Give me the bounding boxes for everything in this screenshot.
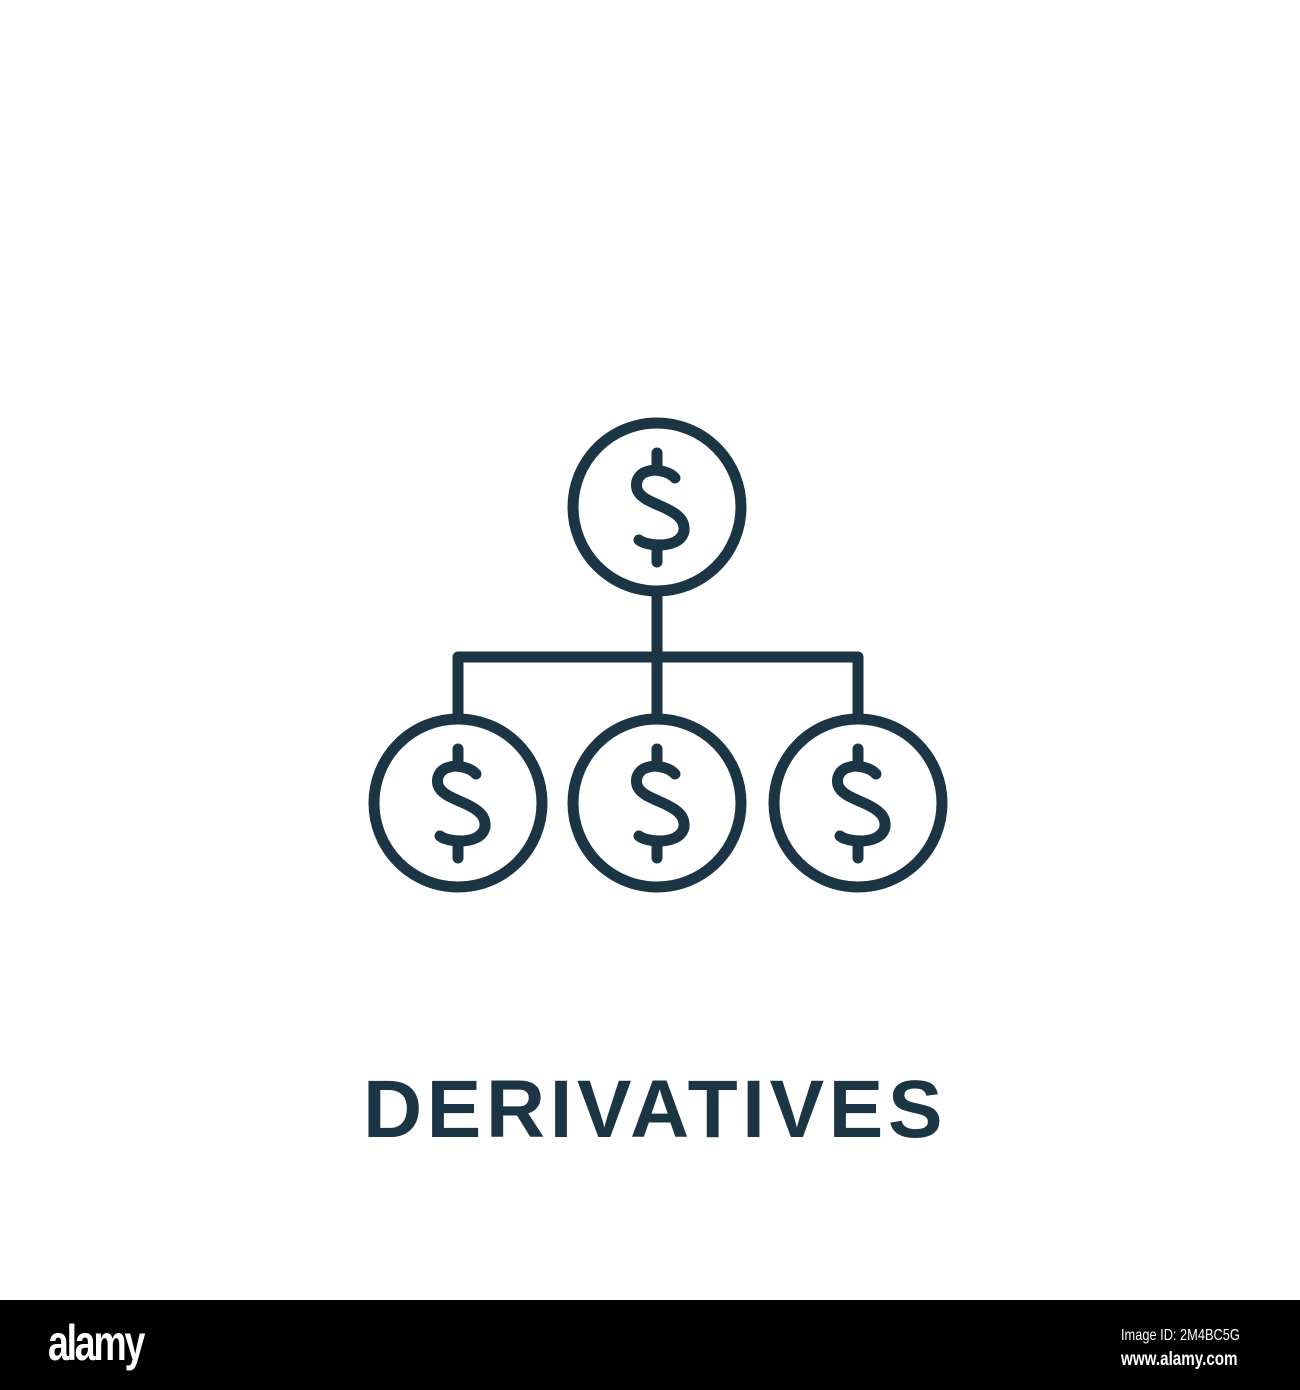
- title: DERIVATIVES: [363, 1064, 947, 1155]
- icon: connector lines: [458, 591, 858, 719]
- footer text: www.alamy.com: [1121, 1349, 1238, 1370]
- icon: bottom left coin: [374, 719, 542, 887]
- footer bar: [0, 1300, 1300, 1390]
- footer logo: alamy: [48, 1315, 143, 1371]
- footer text: [1121, 1327, 1240, 1370]
- icon: bottom middle coin: [573, 719, 741, 887]
- icon: top coin: [573, 423, 741, 591]
- icon: bottom right coin: [774, 719, 942, 887]
- footer text: Image ID: 2M4BC5G: [1121, 1327, 1240, 1344]
